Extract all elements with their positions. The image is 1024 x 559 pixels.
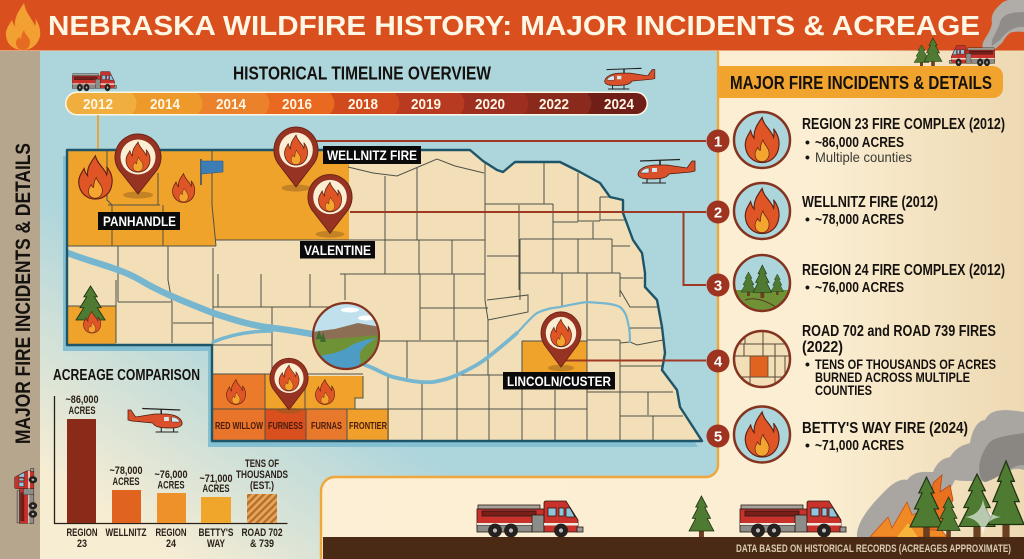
bar values and category labels: (EST.) xyxy=(250,480,274,492)
timeline bar xyxy=(65,92,648,116)
label: Valentine: VALENTINE xyxy=(304,242,371,258)
icon: blue flag xyxy=(201,159,223,185)
icon: vertical fire truck on sidebar xyxy=(15,468,37,523)
panel heading: major fire incidents xyxy=(719,66,1003,98)
icon: fire truck top right xyxy=(949,46,995,66)
county labels: RED WILLOW xyxy=(215,420,263,432)
bar: Betty's Way xyxy=(201,497,231,523)
bar values and category labels: ~78,000 xyxy=(110,465,142,477)
timeline years: 2024 xyxy=(604,96,635,113)
icon: large flame in panhandle xyxy=(79,156,112,199)
panel: map background xyxy=(40,51,718,559)
incident 1: Region 23 xyxy=(706,112,1005,168)
timeline years: 2019 xyxy=(411,96,441,113)
river xyxy=(68,253,630,382)
bar values and category labels: THOUSANDS xyxy=(236,469,288,481)
incident 2 text: WELLNITZ FIRE (2012) xyxy=(802,194,938,211)
timeline years: 2014 xyxy=(150,96,181,113)
bar values and category labels: REGION xyxy=(156,527,187,539)
map pin: Lincoln/Custer xyxy=(541,312,581,371)
chart heading: ACREAGE COMPARISON xyxy=(53,367,200,384)
bar values and category labels: ROAD 702 xyxy=(242,527,282,539)
forest trees xyxy=(910,461,1024,537)
icon: flame in Furnas area xyxy=(315,380,335,404)
incident 4 text: • xyxy=(805,356,810,372)
incident 1 text: Multiple counties xyxy=(815,149,912,165)
bar values and category labels: BETTY'S xyxy=(198,527,234,539)
bar chart: acreage comparison xyxy=(54,394,288,550)
incident 2 text: ~78,000 ACRES xyxy=(815,212,904,228)
bar values and category labels: REGION xyxy=(66,527,98,539)
left sidebar strip xyxy=(0,51,40,559)
icon: tree with flame in southwest county xyxy=(76,286,105,333)
number badge 2 xyxy=(706,200,730,224)
incident 2: Wellnitz xyxy=(706,183,938,239)
incident 3: Region 24 xyxy=(706,255,1005,312)
icon: helicopter above timeline xyxy=(605,68,655,89)
incident 5 text: BETTY'S WAY FIRE (2024) xyxy=(802,420,968,437)
number badge 5: 5 xyxy=(714,428,722,446)
icon: helicopter over map xyxy=(638,160,695,183)
number badge 3: 3 xyxy=(714,278,722,294)
map pin: Furness xyxy=(270,358,308,414)
timeline years xyxy=(83,96,635,113)
county labels xyxy=(215,420,387,432)
icon: forest landscape circle xyxy=(734,255,790,312)
icon: mini county map circle xyxy=(734,331,790,390)
county labels: FURNESS xyxy=(268,420,303,432)
river landscape circle xyxy=(312,303,380,372)
icon: header flame xyxy=(6,3,40,50)
bar values and category labels: & 739 xyxy=(250,538,274,550)
incident 1 text: • xyxy=(805,149,810,165)
highlighted county: Lincoln/Custer xyxy=(522,341,587,372)
icon: flame circle 5 xyxy=(734,406,790,462)
bar: Road 702 and 739 (estimate) xyxy=(247,494,277,523)
incident 1 text: ~86,000 ACRES xyxy=(815,135,904,151)
timeline connector line xyxy=(97,115,99,149)
fire truck A xyxy=(477,501,583,537)
bar values and category labels: WAY xyxy=(207,538,225,550)
icon: flame circle 1 xyxy=(734,112,790,168)
incident 1 text: • xyxy=(805,134,810,150)
bar values and category labels xyxy=(66,394,288,550)
incident 5 text: ~71,000 ACRES xyxy=(815,438,904,454)
header banner xyxy=(0,0,1024,50)
timeline years: 2020 xyxy=(475,96,505,113)
number badge 1 xyxy=(706,130,730,152)
number badge 5 xyxy=(706,424,730,448)
incident 4 text xyxy=(802,323,996,398)
bar values and category labels: ~86,000 xyxy=(66,394,98,406)
bar: Region 23 xyxy=(67,419,96,523)
map pin: Wellnitz xyxy=(274,127,318,192)
title: NEBRASKA WILDFIRE HISTORY: MAJOR INCIDENTS & ACREAGE xyxy=(48,10,980,41)
bar values and category labels: 23 xyxy=(77,538,87,550)
county labels: FURNAS xyxy=(311,420,342,432)
roadside tree xyxy=(689,496,714,538)
number badge 2: 2 xyxy=(714,204,722,222)
bar values and category labels: TENS OF xyxy=(245,458,279,470)
connector lines to numbered incidents xyxy=(316,141,706,360)
bar values and category labels: ~76,000 xyxy=(154,469,188,481)
fire truck B xyxy=(740,501,846,537)
incident 3 text: • xyxy=(805,279,810,295)
incident 2 text: • xyxy=(805,211,810,227)
timeline years: 2016 xyxy=(282,96,312,113)
number badge 4 xyxy=(706,350,730,372)
timeline heading: HISTORICAL TIMELINE OVERVIEW xyxy=(233,64,491,84)
highlighted county: southwest xyxy=(67,306,116,344)
incident 4 text: COUNTIES xyxy=(815,382,872,398)
number badge 3 xyxy=(706,274,730,296)
icon: fire truck above timeline xyxy=(72,72,117,91)
bar: Wellnitz xyxy=(112,490,141,523)
timeline years: 2022 xyxy=(539,96,569,113)
icon: trees top right xyxy=(914,38,942,66)
bar values and category labels: WELLNITZ xyxy=(106,527,147,539)
label: Panhandle: PANHANDLE xyxy=(103,213,176,229)
sparkle watermark xyxy=(965,499,1001,535)
map pin: Valentine xyxy=(308,174,352,238)
incident 2 text xyxy=(802,194,938,228)
smoke plume xyxy=(857,410,1024,537)
label: Lincoln/Custer: LINCOLN/CUSTER xyxy=(507,373,611,389)
incident 1 text xyxy=(802,116,1005,165)
highlighted burn region: panhandle and north xyxy=(67,150,349,246)
incident 4: Road 702 and 739 xyxy=(706,323,996,398)
timeline years: 2012 xyxy=(83,96,113,113)
incident 5: Betty's Way xyxy=(706,406,968,462)
icon: helicopter by chart xyxy=(128,408,182,432)
icon: header smoke xyxy=(982,0,1024,50)
map pin: Panhandle xyxy=(115,134,161,198)
number badge 1: 1 xyxy=(714,134,722,150)
icon: small flame in panhandle xyxy=(172,174,195,202)
bar values and category labels: ACRES xyxy=(158,480,184,492)
bar values and category labels: 24 xyxy=(166,538,177,550)
timeline years: 2014 xyxy=(216,96,247,113)
incident 4 text: BURNED ACROSS MULTIPLE xyxy=(815,369,970,385)
county labels: FRONTIER xyxy=(349,420,387,432)
sidebar heading: MAJOR FIRE INCIDENTS & DETAILS xyxy=(12,143,35,444)
bar values and category labels: ACRES xyxy=(202,483,230,495)
highlighted counties: southwest burn area xyxy=(213,374,389,441)
bar: Region 24 xyxy=(157,493,186,523)
label: Wellnitz Fire: WELLNITZ FIRE xyxy=(327,147,417,163)
bar values and category labels: ~71,000 xyxy=(200,473,232,485)
incident 3 text: ~76,000 ACRES xyxy=(815,280,904,296)
number badge 4: 4 xyxy=(714,354,723,370)
timeline years: 2018 xyxy=(348,96,378,113)
map of Nebraska xyxy=(63,150,702,447)
incident 5 text: • xyxy=(805,437,810,453)
icon: flame in Red Willow area xyxy=(226,380,246,404)
incident 4 text: (2022) xyxy=(802,339,843,356)
bar values and category labels: ACRES xyxy=(112,476,140,488)
incident 5 text xyxy=(802,420,968,454)
flames in forest xyxy=(870,475,953,537)
incident 3 text xyxy=(802,262,1005,296)
ground band xyxy=(323,537,1024,559)
icon: flame circle 2 xyxy=(734,183,790,239)
bar values and category labels: ACRES xyxy=(68,405,96,417)
